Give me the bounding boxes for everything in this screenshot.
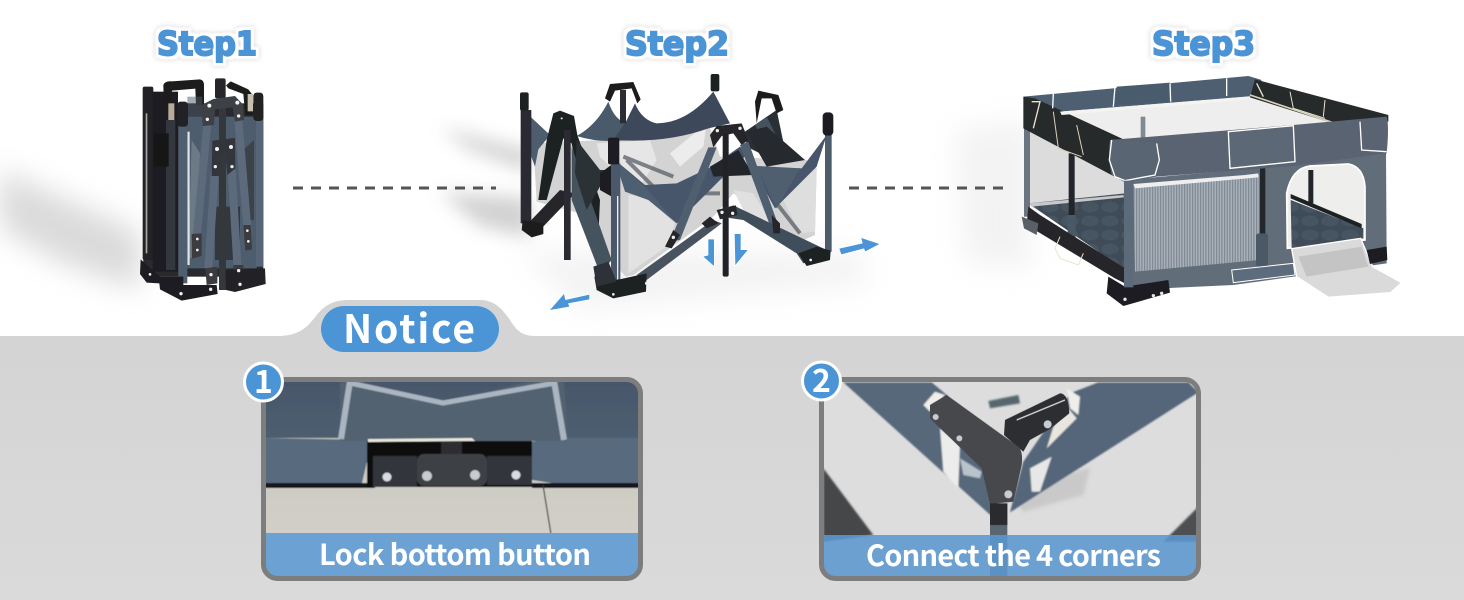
badge: number 1: 1 — [254, 357, 273, 403]
arrow: down left — [703, 239, 714, 266]
caption: lock bottom button: Lock bottom button — [319, 532, 591, 574]
mattress blur detail — [988, 395, 1020, 408]
bracket post — [440, 442, 463, 454]
illustration: folded playpen frame — [140, 78, 266, 301]
struts behind mesh — [623, 157, 800, 233]
arrow: down right — [735, 234, 748, 265]
base frame — [1027, 207, 1125, 283]
badge: number 1 — [244, 357, 282, 403]
floor shadows behind products — [0, 120, 1030, 310]
front mesh — [1133, 175, 1259, 272]
caption band — [265, 533, 639, 577]
panel: grey lower section with Notice tab — [0, 300, 1464, 600]
floor crack — [542, 484, 552, 533]
title: Step1: Step1 — [157, 24, 257, 63]
right fabric — [1010, 382, 1198, 512]
badge: number 2: 2 — [812, 356, 831, 402]
dashed connector: step 2 to step 3 — [849, 186, 1006, 190]
door opening — [1287, 164, 1365, 248]
left connector arm — [930, 395, 1022, 504]
photo frame — [822, 380, 1198, 578]
title: Step3: Step3 — [1152, 24, 1255, 63]
shadow gap — [367, 441, 532, 487]
front top rail — [1109, 117, 1388, 182]
front panel — [1124, 153, 1387, 290]
upper fabric — [265, 381, 639, 438]
title: Step2: Step2 — [625, 24, 729, 63]
front left tripod — [538, 111, 600, 237]
panel: connect the 4 corners photo — [822, 380, 1198, 578]
arrow: right — [839, 238, 879, 254]
caption: connect the 4 corners: Connect the 4 corners — [866, 533, 1161, 575]
caption band — [823, 535, 1198, 577]
panel: lock bottom button photo — [264, 380, 640, 578]
back and side rails — [1023, 76, 1262, 112]
photo frame — [264, 380, 640, 578]
illustration: fully assembled playpen — [1022, 76, 1402, 306]
arrow: lower left — [550, 294, 589, 310]
heading: Notice badge: Notice — [343, 299, 475, 355]
badge: number 2 — [802, 356, 840, 402]
lower fabric — [265, 438, 372, 483]
front fabric band — [615, 135, 827, 223]
door mat — [1292, 238, 1402, 297]
pocket — [340, 381, 568, 441]
left fabric — [843, 382, 993, 518]
right connector arm — [1004, 393, 1069, 452]
illustration: half unfolded playpen frame — [520, 74, 879, 310]
dashed connector: step 1 to step 2 — [293, 186, 496, 190]
bracket — [373, 456, 417, 487]
post — [990, 503, 1007, 577]
